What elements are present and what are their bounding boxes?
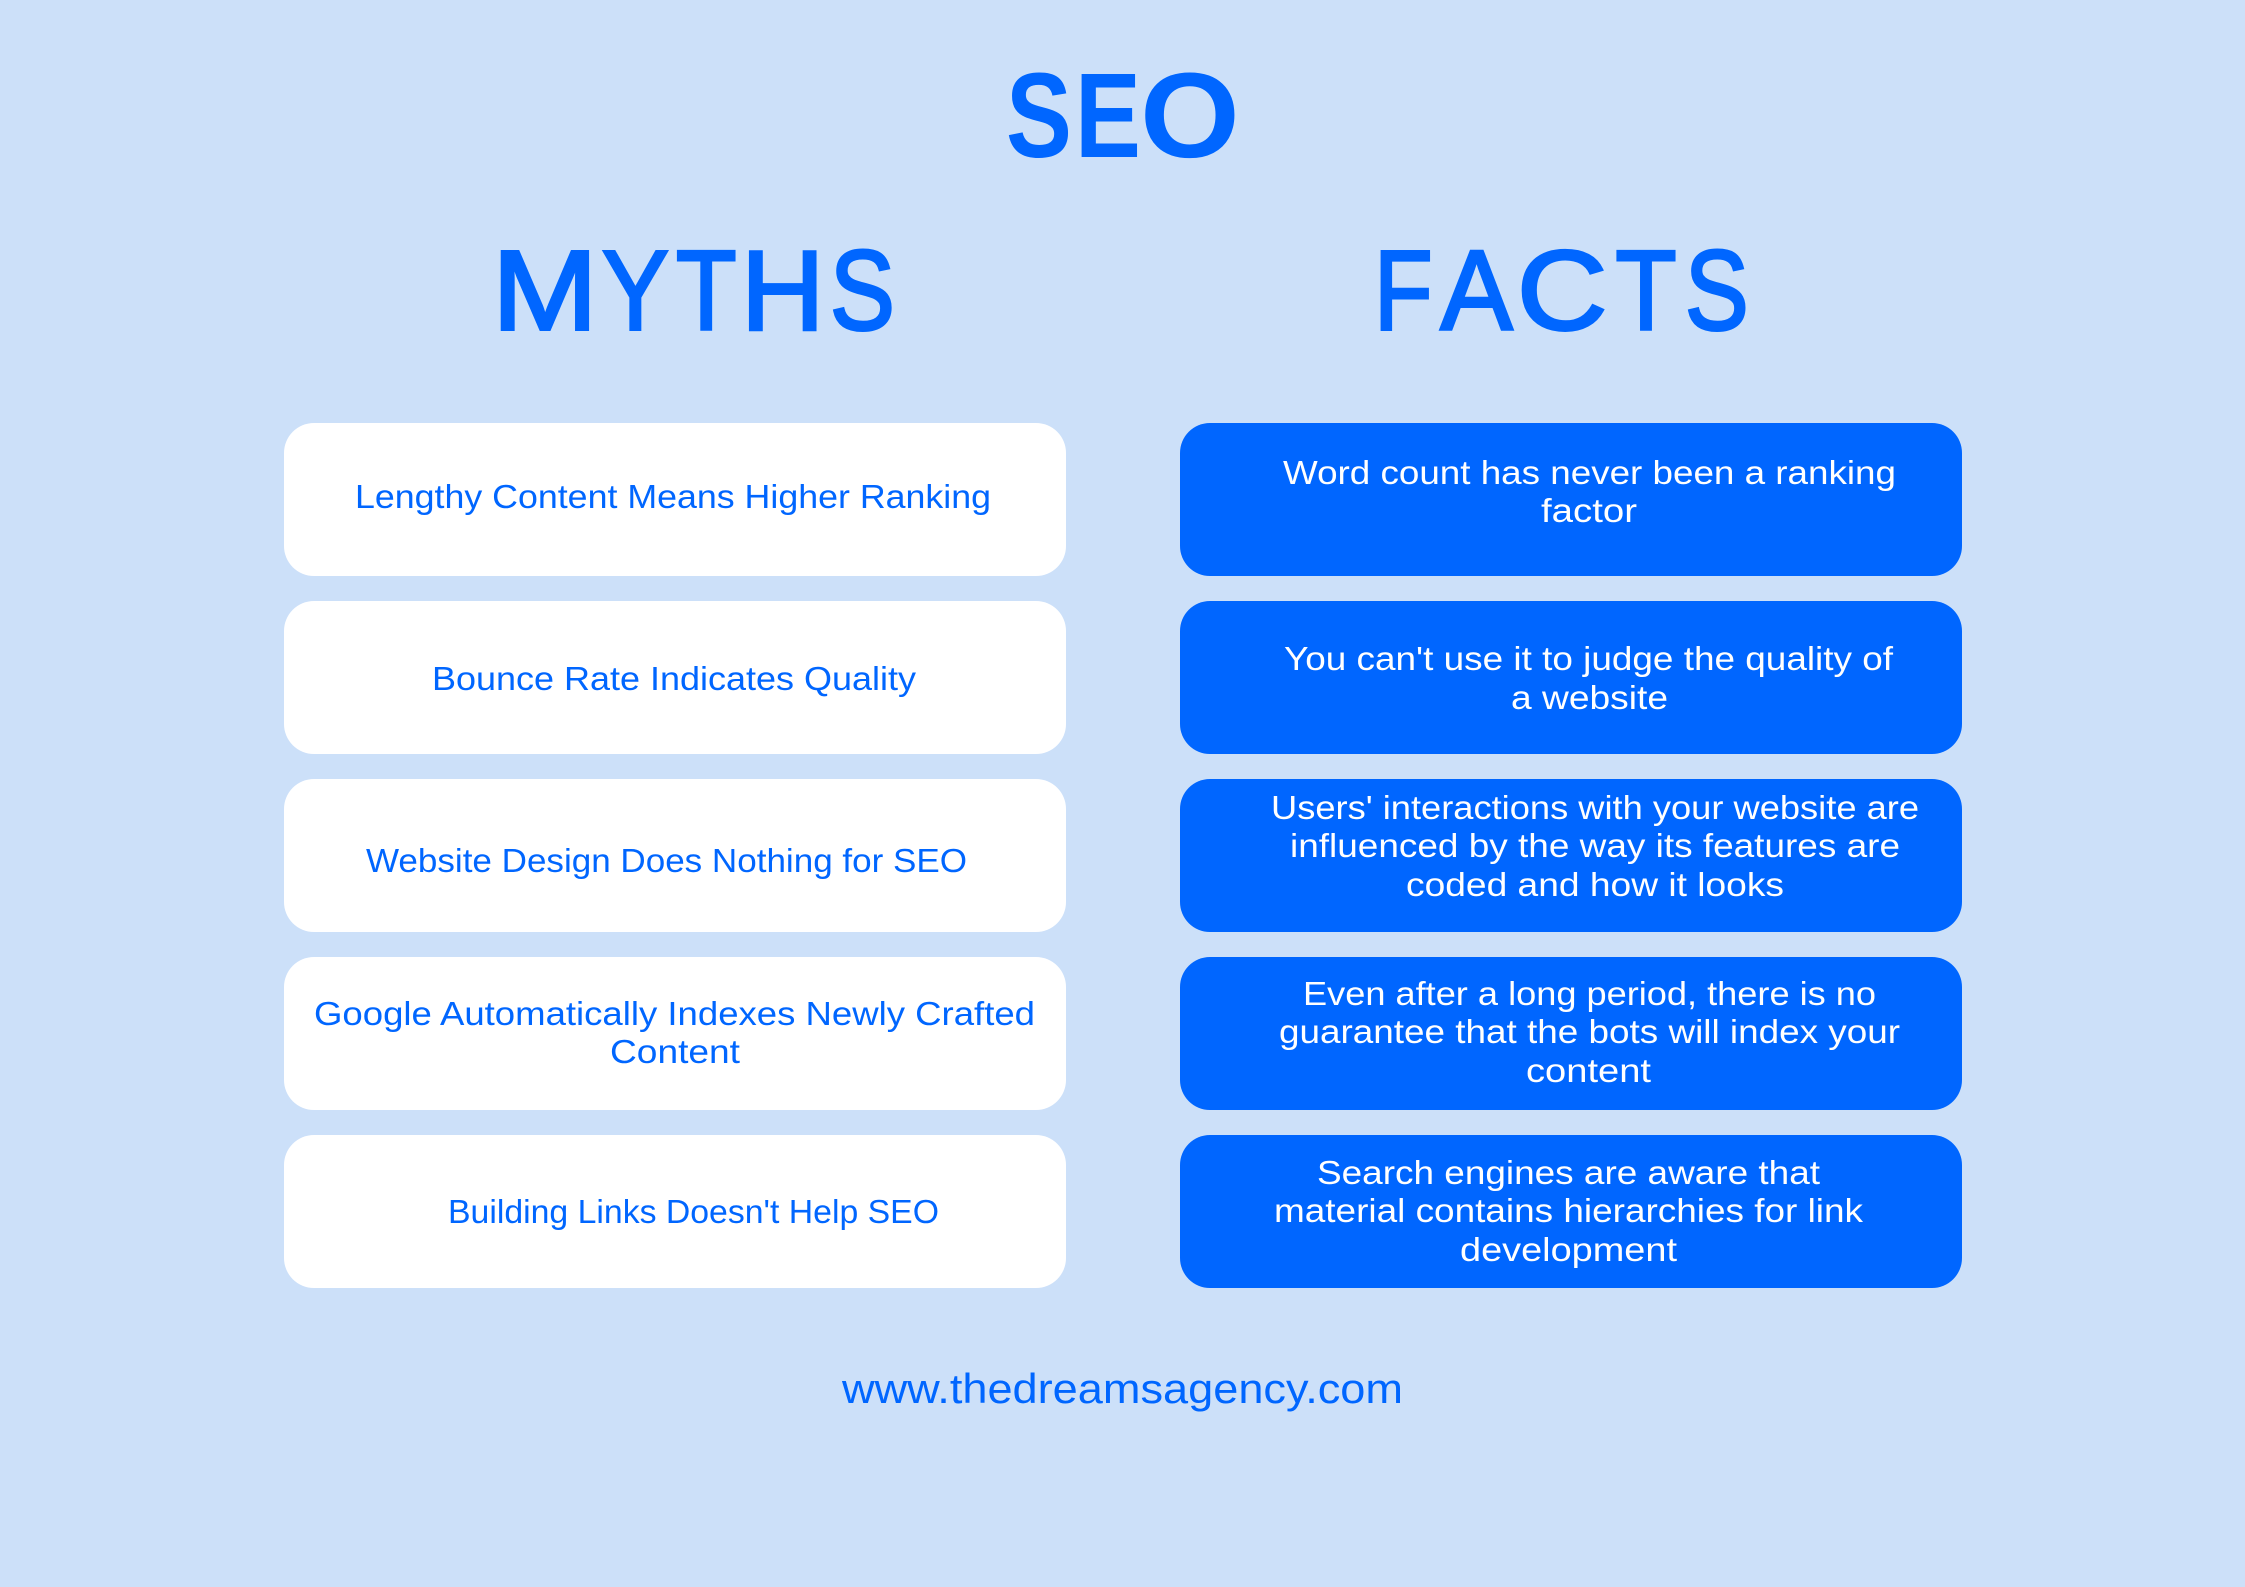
fact card 3: coded and how it looks <box>1406 866 1784 903</box>
myth card 1: Lengthy Content Means Higher Ranking <box>355 478 991 515</box>
fact card 2: a website <box>1511 679 1668 716</box>
fact card 4: guarantee that the bots will index your <box>1279 1013 1900 1050</box>
myth card 5: Building Links Doesn't Help SEO <box>448 1193 939 1230</box>
myth card 5 <box>284 1135 1066 1288</box>
panel: facts column <box>1180 423 1962 1288</box>
heading: myths: H <box>741 228 824 354</box>
myth card 4 <box>284 957 1066 1110</box>
heading: myths <box>492 228 895 354</box>
title: E <box>1075 47 1141 183</box>
fact card 3 <box>1180 779 1962 932</box>
heading: facts: A <box>1440 228 1513 354</box>
myth card 2 <box>284 601 1066 754</box>
footer website url: www.thedreamsagency.com <box>841 1365 1403 1412</box>
fact card 5: Search engines are aware that <box>1317 1154 1820 1191</box>
myth card 3 <box>284 779 1066 932</box>
panel: myths column <box>284 423 1066 1288</box>
heading: myths: Y <box>602 228 669 354</box>
fact card 1 <box>1180 423 1962 576</box>
fact card 4 <box>1180 957 1962 1110</box>
fact card 4: Even after a long period, there is no <box>1303 975 1876 1012</box>
fact card 2 <box>1180 601 1962 754</box>
heading: facts: T <box>1616 228 1676 354</box>
title: O <box>1140 47 1240 183</box>
fact card 2: You can't use it to judge the quality of <box>1284 640 1894 677</box>
fact card 1: Word count has never been a ranking <box>1283 454 1896 491</box>
fact card 5: development <box>1460 1231 1677 1268</box>
fact card 5 <box>1180 1135 1962 1288</box>
myth card 4: Google Automatically Indexes Newly Crafted <box>314 995 1035 1032</box>
title <box>1006 47 1240 183</box>
heading: myths: S <box>830 228 895 354</box>
title: S <box>1006 47 1072 183</box>
fact card 4: content <box>1526 1052 1651 1089</box>
heading: facts: F <box>1374 228 1433 354</box>
fact card 3: Users' interactions with your website are <box>1271 789 1919 826</box>
myth card 4: Content <box>610 1033 740 1070</box>
myth card 3: Website Design Does Nothing for SEO <box>366 842 967 879</box>
fact card 3: influenced by the way its features are <box>1290 827 1900 864</box>
heading: myths: M <box>492 228 598 354</box>
myth card 2: Bounce Rate Indicates Quality <box>432 660 917 697</box>
fact card 1: factor <box>1541 492 1637 529</box>
myth card 1 <box>284 423 1066 576</box>
heading: facts: S <box>1685 228 1749 354</box>
fact card 5: material contains hierarchies for link <box>1274 1192 1864 1229</box>
heading: facts <box>1374 228 1749 354</box>
heading: facts: C <box>1517 228 1607 354</box>
heading: myths: T <box>676 228 736 354</box>
